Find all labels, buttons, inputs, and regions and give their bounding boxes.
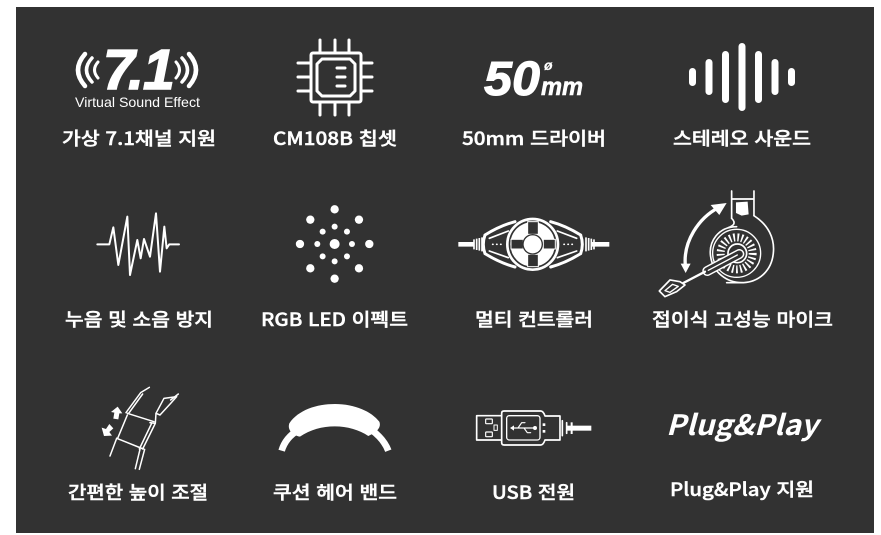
label: height adjustment: 간편한 높이 조절 [68, 479, 208, 505]
icon: 50mm driver [484, 53, 583, 106]
icon: multi controller [458, 219, 609, 270]
icon: noise waveform [97, 213, 179, 275]
label: USB power: USB 전원 [492, 479, 575, 505]
label: RGB LED: RGB LED 이펙트 [261, 306, 408, 332]
icon: stereo bars [689, 43, 795, 111]
label: chipset: CM108B 칩셋 [273, 125, 397, 151]
label: virtual 7.1: 가상 7.1채널 지원 [62, 125, 216, 151]
icon: 50mm driver: ø [544, 57, 553, 73]
icon: chip [298, 40, 372, 115]
icon: 50mm driver: mm [541, 73, 583, 101]
label: Plug&Play support: Plug&Play 지원 [670, 476, 814, 502]
icon: virtual 7.1 sound effect: 7 [103, 38, 137, 102]
label: multi controller: 멀티 컨트롤러 [475, 306, 593, 332]
label: noise prevention: 누음 및 소음 방지 [65, 306, 213, 332]
icon: Plug&Play wordmark: Plug&Play [666, 404, 822, 444]
icon: virtual 7.1 sound effect: . [128, 38, 144, 102]
icon: cushion headband [282, 404, 388, 451]
label: foldable mic: 접이식 고성능 마이크 [652, 306, 833, 332]
icon: virtual 7.1 sound effect [75, 38, 200, 110]
label: stereo sound: 스테레오 사운드 [673, 125, 811, 151]
icon: height adjustment [102, 387, 178, 469]
icon: RGB LED dots [296, 205, 373, 283]
icon: foldable microphone headset [659, 191, 774, 297]
icon: 50mm driver: 50 [484, 53, 540, 106]
icon: virtual 7.1 sound effect: Virtual Sound Effect [75, 94, 200, 110]
icon: USB connector [477, 411, 591, 445]
label: 50mm driver: 50mm 드라이버 [462, 125, 606, 151]
icon: virtual 7.1 sound effect: 1 [143, 38, 175, 102]
label: cushion headband: 쿠션 헤어 밴드 [273, 479, 397, 505]
